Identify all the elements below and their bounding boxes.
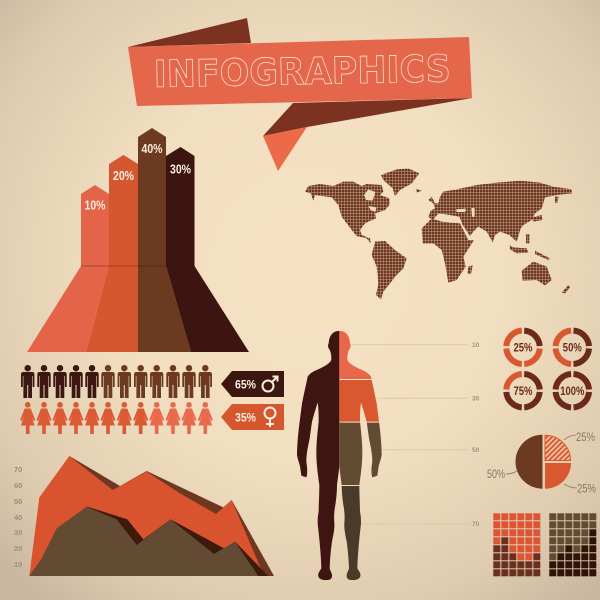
pie leader lines bbox=[506, 435, 577, 488]
donut 75%: 75% bbox=[514, 386, 532, 398]
Australia bbox=[522, 262, 552, 285]
bar 30% bbox=[166, 147, 249, 352]
Eurasia bbox=[428, 181, 572, 242]
female 35% tag: 35% bbox=[235, 410, 256, 424]
area chart axis labels bbox=[14, 465, 22, 569]
ruler labels: 70 bbox=[472, 521, 480, 528]
square grid right bbox=[549, 513, 596, 576]
South America bbox=[372, 241, 407, 299]
bar 10% bbox=[27, 185, 109, 352]
bar 40%: 40% bbox=[142, 142, 162, 156]
icon: male symbol bbox=[262, 376, 278, 392]
donut 100%: 100% bbox=[560, 386, 584, 398]
area chart axis labels: 10 bbox=[14, 560, 22, 569]
female 35% tag bbox=[221, 404, 284, 430]
arrow bar chart bbox=[27, 128, 249, 352]
bar 20%: 20% bbox=[113, 169, 134, 183]
Iceland bbox=[416, 189, 422, 193]
title ribbon banner bbox=[128, 18, 472, 171]
pie labels bbox=[487, 430, 596, 496]
ribbon front bbox=[128, 37, 472, 106]
area chart axis labels: 50 bbox=[14, 497, 22, 506]
pie chart bbox=[487, 430, 596, 496]
ribbon back fold top bbox=[128, 18, 251, 47]
pie labels: 50% bbox=[487, 467, 505, 481]
row of women bbox=[20, 402, 213, 434]
ruler labels: 10 bbox=[472, 342, 480, 349]
ribbon back fold bottom bbox=[263, 98, 472, 136]
North America bbox=[305, 182, 389, 243]
title: INFOGRAPHICS bbox=[153, 47, 451, 96]
area chart axis labels: 20 bbox=[14, 544, 22, 553]
donut 50%: 50% bbox=[563, 342, 582, 354]
icon: female symbol bbox=[264, 408, 276, 427]
pie half 50% bbox=[516, 435, 542, 489]
body silhouette bbox=[297, 331, 382, 580]
Africa bbox=[422, 218, 474, 283]
square grid left bbox=[493, 513, 540, 576]
Greenland bbox=[381, 168, 419, 196]
area chart axis labels: 70 bbox=[14, 465, 22, 474]
ribbon tail tip bbox=[263, 127, 307, 171]
Madagascar bbox=[467, 265, 473, 274]
dotted world map bbox=[305, 168, 572, 299]
pie labels: 25% bbox=[576, 430, 595, 444]
bar 20% bbox=[86, 155, 138, 352]
donut 25%: 25% bbox=[514, 342, 532, 354]
area chart axis labels: 30 bbox=[14, 528, 22, 537]
ruler labels bbox=[472, 342, 480, 528]
donut charts bbox=[506, 331, 589, 407]
area chart axis labels: 60 bbox=[14, 481, 22, 490]
bar 30%: 30% bbox=[170, 162, 191, 176]
area chart axis labels: 40 bbox=[14, 513, 22, 522]
male 65% tag: 65% bbox=[235, 378, 256, 392]
male 65% tag bbox=[221, 371, 284, 397]
pie hatched quarter bbox=[545, 435, 570, 460]
area chart bbox=[14, 456, 274, 576]
inland seas bbox=[364, 189, 475, 221]
ruler lines bbox=[351, 345, 468, 524]
ruler labels: 50 bbox=[472, 447, 480, 454]
human body figure bbox=[297, 331, 480, 580]
bar 40% bbox=[138, 128, 191, 352]
row of men bbox=[21, 365, 212, 398]
male and female pictograms bbox=[20, 365, 213, 434]
Asian islands bbox=[509, 245, 528, 253]
ruler labels: 30 bbox=[472, 396, 480, 402]
pie orange quarter bbox=[545, 463, 571, 489]
area chart shapes bbox=[29, 456, 274, 576]
bar 10%: 10% bbox=[84, 198, 106, 212]
